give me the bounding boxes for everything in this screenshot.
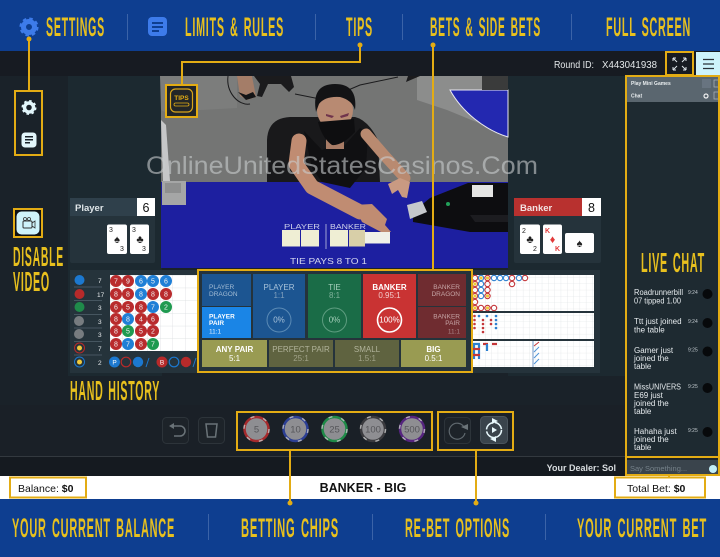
icon: limits document blue — [148, 17, 167, 36]
chat message: joined the — [633, 354, 669, 363]
bet: player pair: 11:1 — [209, 328, 222, 336]
bet: any pair — [202, 340, 267, 367]
top banner: SETTINGS — [46, 12, 105, 42]
bottom banner: BETTING CHIPS — [241, 513, 339, 543]
bet: banker selected: BANKER — [372, 283, 407, 292]
left arm — [296, 141, 360, 212]
bet: player pair: PLAYER — [209, 314, 235, 320]
round id: X443041938 — [602, 60, 657, 71]
top banner: LIMITS & RULES — [185, 12, 284, 42]
chat input — [627, 460, 720, 475]
panel: hand history bead road: 5 — [151, 278, 155, 286]
card: 3 of clubs — [130, 224, 149, 254]
chat message: 9:25 — [688, 428, 698, 434]
bet: player pair — [202, 307, 251, 338]
card: 3 of spades: 3 — [109, 227, 113, 234]
chip: 100 — [360, 416, 386, 442]
watermark: OnlineUnitedStatesCasinos.Com — [146, 152, 538, 180]
panel: hand history bead road: 2 — [151, 328, 155, 336]
background chair legs and heels — [228, 76, 420, 104]
card: 3 of spades: 3 — [120, 246, 124, 253]
bead grid — [110, 275, 198, 351]
road predictor: B — [160, 360, 164, 366]
chat message: joined the — [633, 435, 669, 444]
card: king of diamonds: ♦ — [550, 234, 556, 246]
table markings and cards: TIE PAYS 8 TO 1 — [290, 257, 368, 266]
card: king of diamonds: K — [545, 228, 550, 235]
chat message: 9:24 — [688, 319, 698, 325]
bet: banker selected — [363, 274, 416, 338]
chip: 25: 25 — [329, 424, 340, 436]
chat message: 9:25 — [688, 384, 698, 390]
bet: player pair: PAIR — [209, 320, 224, 327]
chat message: the table — [634, 326, 665, 334]
control: repeat button — [444, 418, 470, 444]
dealer chair — [267, 117, 380, 182]
panel: hand history bead road: 7 — [126, 342, 130, 348]
bet: player: PLAYER — [264, 283, 295, 292]
top banner: BETS & SIDE BETS — [430, 12, 541, 42]
panel: hand history bead road: 8 — [126, 316, 130, 324]
connector: betting chips — [288, 450, 292, 506]
bet: banker pair: PAIR — [445, 320, 460, 327]
panel: hand history bead road: 8 — [139, 342, 143, 348]
top banner: TIPS — [346, 12, 373, 42]
panel: hand history bead road: 7 — [151, 304, 155, 312]
bet: tie — [308, 274, 361, 338]
dealer label: Your Dealer: Sol — [547, 463, 616, 473]
chat message: joined the — [633, 399, 669, 408]
chip: 5: 5 — [254, 424, 259, 436]
bet: banker dragon: DRAGON — [431, 291, 460, 298]
chip: 500 — [400, 416, 424, 442]
card: 2 of clubs: 2 — [522, 228, 526, 235]
left hand — [354, 204, 391, 232]
card: king of diamonds — [543, 224, 562, 254]
bet: small: SMALL — [354, 345, 381, 354]
bet: player dragon: PLAYER — [209, 284, 234, 291]
chat message — [634, 288, 712, 306]
card: king of diamonds: K — [555, 246, 560, 253]
panel: hand history bead road: 5 — [126, 328, 130, 336]
total bet — [615, 475, 705, 498]
stats column: 3 — [98, 305, 102, 312]
bet: banker selected: 100% — [379, 316, 400, 324]
bet: banker selected: 0.95:1 — [378, 291, 401, 300]
bet: small: 1.5:1 — [358, 354, 376, 363]
bet: perfect pair: 25:1 — [293, 354, 309, 363]
card: 3 of clubs: 3 — [142, 246, 146, 253]
chat message: table — [634, 443, 652, 452]
bet: big: BIG — [426, 345, 441, 354]
big road — [472, 275, 528, 311]
bet: player dragon: DRAGON — [209, 291, 238, 298]
card: 3 of spades — [107, 224, 127, 254]
callout: live chat frame — [626, 76, 719, 475]
chat message: 07 tipped 1.00 — [634, 296, 682, 306]
chat message — [634, 317, 712, 334]
right hand — [388, 178, 410, 198]
bet: banker pair: 11:1 — [448, 328, 460, 336]
bet: player — [253, 274, 305, 338]
panel: hand history bead road: 8 — [114, 328, 118, 336]
bottom banner — [0, 499, 720, 557]
bet: perfect pair: PERFECT PAIR — [272, 345, 330, 354]
blue baccarat table — [161, 182, 508, 268]
stats column: 3 — [98, 319, 102, 326]
panel: hand history bead road: 8 — [114, 342, 118, 348]
bet: big — [401, 340, 466, 367]
callout: disable video — [14, 209, 42, 237]
panel: betting grid — [199, 271, 471, 371]
icon: rules document — [22, 132, 36, 148]
chip: 10: 10 — [290, 424, 301, 436]
icon: settings gear blue — [21, 19, 37, 35]
card: 2 of clubs: 2 — [533, 246, 537, 253]
chat input: Say Something... — [630, 464, 687, 473]
current selection: BANKER - BIG — [320, 481, 406, 495]
connector: re-bet options — [474, 450, 478, 506]
card: 3 of spades: ♠ — [114, 234, 120, 246]
bet: banker dragon: BANKER — [433, 284, 460, 291]
panel: hand history bead road: 6 — [151, 316, 155, 324]
chat message: Ttt just joined — [634, 317, 682, 326]
bottom banner: YOUR CURRENT BALANCE — [12, 513, 175, 543]
bet: small — [335, 340, 399, 367]
bet: player: 1:1 — [273, 291, 285, 300]
stats column: 17 — [97, 292, 105, 299]
status strip — [0, 475, 720, 499]
panel: hand history bead road: 8 — [126, 292, 130, 298]
bet: any pair: ANY PAIR — [216, 345, 253, 354]
callout: tips: TIPS — [174, 95, 189, 102]
balance: Balance: $0 — [18, 483, 74, 495]
panel: hand history bead road: 6 — [164, 278, 168, 286]
chat message: table — [634, 407, 652, 416]
icon: gear — [22, 101, 36, 114]
stats column: 7 — [98, 346, 102, 353]
chip: 500: 500 — [404, 424, 420, 436]
bet: perfect pair — [269, 340, 333, 367]
callout: full screen — [666, 52, 693, 75]
panel: hand history bead road: 2 — [164, 304, 168, 312]
bet: any pair: 5:1 — [229, 354, 241, 363]
text: HAND HISTORY — [70, 375, 160, 406]
panel: hand history bead road: 8 — [139, 292, 143, 298]
right arm — [366, 134, 405, 178]
panel: live chat: Play Mini Games — [631, 81, 671, 87]
control: undo button — [162, 418, 188, 444]
road predictor: P — [112, 360, 117, 366]
neck — [326, 135, 344, 149]
panel: player hand — [70, 198, 155, 263]
panel: player hand: Player — [75, 203, 104, 214]
stats column: 7 — [98, 278, 102, 285]
head — [317, 90, 353, 130]
panel: hand history bead road: 7 — [151, 342, 155, 348]
chip: 25 — [322, 416, 347, 442]
round id: Round ID: — [554, 60, 594, 71]
chat message — [633, 346, 712, 371]
panel: live chat: Chat — [631, 94, 642, 100]
table markings and cards: PLAYER — [284, 222, 321, 231]
big eye road — [474, 316, 496, 336]
dealer — [296, 84, 410, 232]
bet: player dragon — [202, 274, 251, 306]
total bet: Total Bet: $0 — [627, 483, 686, 495]
heading: disable video: VIDEO — [13, 266, 50, 297]
panel: hand history bead road: 8 — [151, 292, 155, 298]
card: 3 of clubs: 3 — [132, 227, 136, 234]
panel: hand history bead road: 4 — [139, 316, 143, 324]
chat message: Roadrunnerbill — [634, 288, 683, 297]
card shoe — [407, 183, 508, 232]
bet: big: 0.5:1 — [425, 354, 443, 363]
chat message — [633, 427, 712, 452]
panel: banker hand: Banker — [520, 203, 553, 214]
table markings and cards: BANKER — [330, 222, 367, 231]
chat message: Hahaha just — [634, 427, 677, 436]
panel: player hand: 6 — [143, 201, 150, 215]
heading: disable video — [13, 241, 64, 297]
chat message: table — [634, 362, 652, 371]
card: 2 of clubs: ♣ — [526, 234, 534, 246]
panel: hand history bead road: 6 — [114, 304, 118, 312]
black sleeveless top — [304, 128, 368, 188]
panel: hand history bead road: 5 — [126, 304, 130, 312]
panel: hand history bead road: 7 — [114, 278, 118, 286]
road predictor — [109, 356, 196, 368]
control: auto re-bet button — [480, 416, 508, 444]
panel: hand history bead road: 5 — [139, 328, 143, 336]
card: sideways spade: ♠ — [577, 238, 583, 250]
panel: live chat — [627, 77, 720, 475]
panel: hand history bead road: 9 — [126, 278, 130, 286]
panel: banker hand — [514, 198, 601, 263]
callout: tips — [166, 42, 362, 117]
stats column: 3 — [98, 332, 102, 339]
top banner — [0, 0, 720, 51]
chat message: 9:25 — [688, 348, 698, 354]
callout: betting chips — [237, 412, 432, 450]
bet: tie: 8:1 — [329, 291, 341, 300]
chip: 10 — [283, 416, 308, 442]
office desk and far table — [160, 76, 508, 181]
hair — [315, 84, 355, 112]
chat message — [633, 382, 712, 416]
bet: player: 0% — [273, 316, 285, 324]
bet: banker dragon — [418, 274, 466, 306]
control: clear button — [198, 418, 224, 444]
table markings and cards — [282, 222, 390, 266]
stats column: 2 — [98, 360, 102, 367]
text: DISABLE — [13, 241, 64, 272]
bet: tie: 0% — [329, 316, 340, 324]
black face mask — [318, 119, 355, 145]
chat message: E69 just — [634, 391, 664, 400]
callout: bets — [198, 42, 472, 372]
icon: hamburger menu — [696, 52, 720, 75]
round id — [554, 60, 657, 71]
bet: banker pair — [418, 307, 466, 338]
eye makeup — [326, 113, 349, 118]
chip: 100: 100 — [365, 424, 381, 436]
panel: hand history bead road — [70, 270, 198, 373]
panel: hand history bead road: 8 — [114, 316, 118, 324]
card: 2 of clubs — [520, 224, 540, 254]
small road — [472, 341, 539, 367]
panel: hand history bead road: 6 — [139, 278, 143, 286]
chat message: Gamer just — [634, 346, 674, 355]
bottom banner: RE-BET OPTIONS — [405, 513, 510, 543]
callout: re-bet options — [438, 412, 513, 450]
panel: hand history bead road: 8 — [164, 292, 168, 298]
left gadget — [162, 181, 186, 205]
chat message: 9:24 — [688, 290, 698, 296]
bet: banker pair: BANKER — [433, 314, 460, 320]
stats column — [74, 275, 105, 367]
panel: derived roads — [472, 270, 600, 373]
balance — [10, 478, 86, 498]
panel: banker hand: 8 — [588, 201, 595, 215]
callout: settings and rules — [15, 36, 42, 155]
panel: hand history bead road: 8 — [139, 304, 143, 312]
card: 3 of clubs: ♣ — [136, 234, 144, 246]
chip: 5 — [244, 416, 269, 442]
video feed — [160, 76, 508, 268]
panel: hand history bead road: 8 — [114, 292, 118, 298]
chat message: MissUNIVERS — [634, 382, 681, 392]
bet: tie: TIE — [328, 283, 341, 292]
